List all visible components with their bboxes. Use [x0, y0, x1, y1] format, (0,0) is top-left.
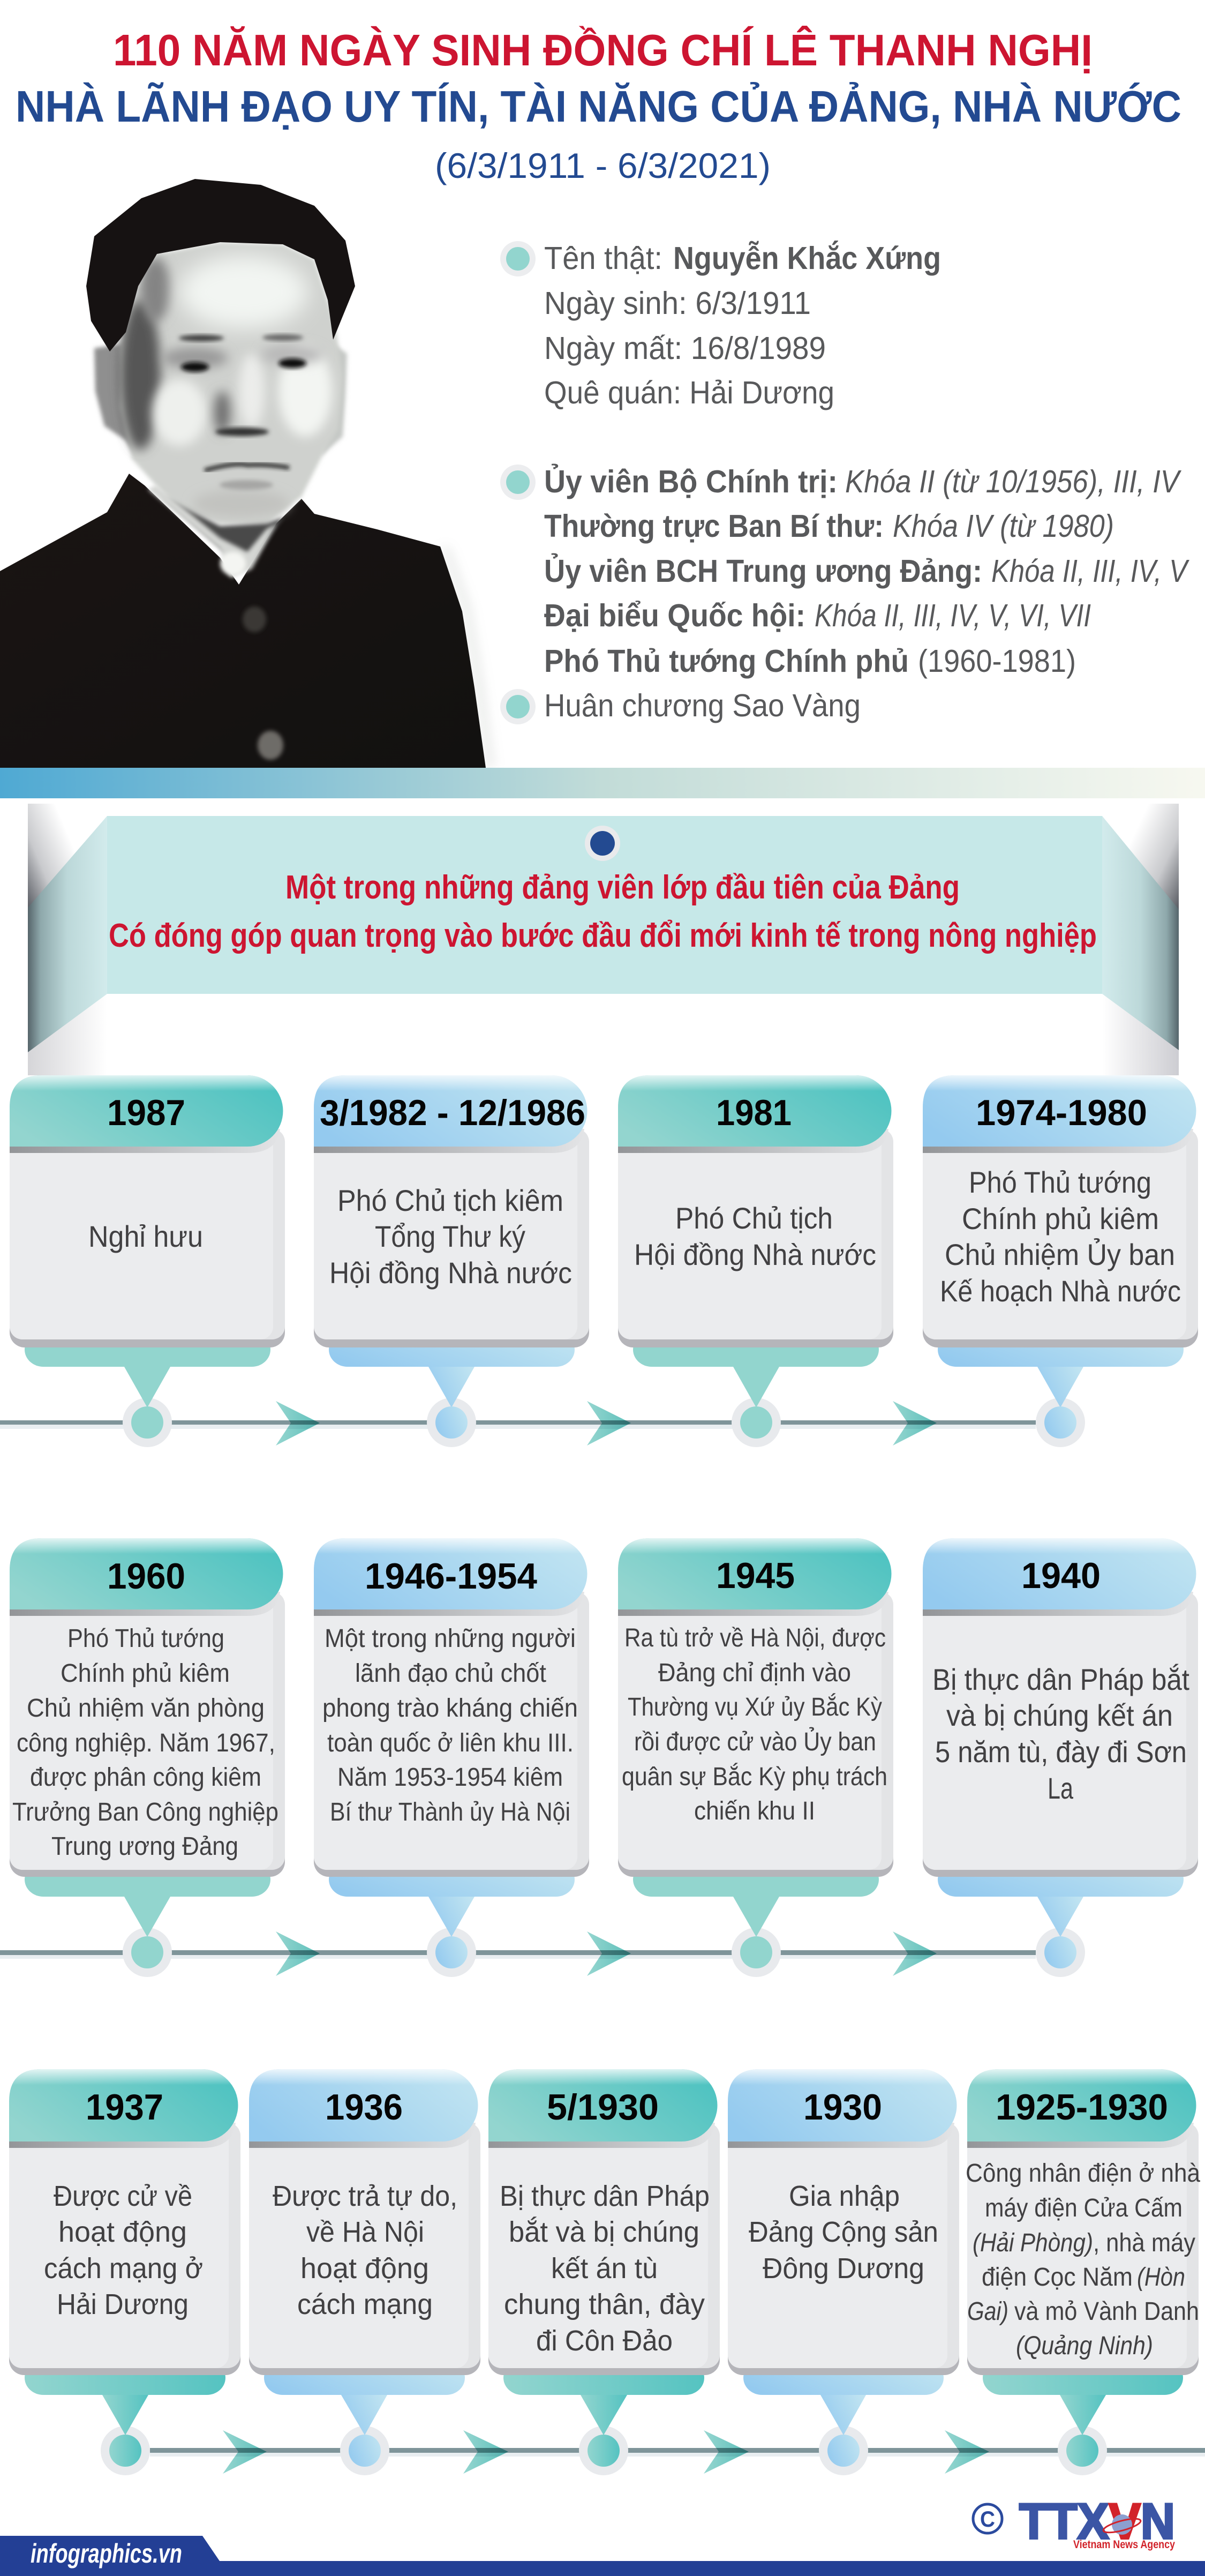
card text: 1930: 1930: [803, 2087, 882, 2128]
card text: 1937: 1937: [86, 2087, 163, 2128]
card text: 1960: 1960: [107, 1556, 185, 1597]
card text: 5/1930: chung thân, đày: [504, 2288, 705, 2320]
card text: 1946-1954: Năm 1953-1954 kiêm: [337, 1763, 563, 1792]
card text: 1960: Trưởng Ban Công nghiệp: [12, 1798, 278, 1826]
arrows row 2: [276, 1931, 937, 1976]
personal info list: Nguyễn Khắc Xứng: [673, 241, 941, 276]
card text: 1940: La: [1048, 1771, 1074, 1805]
timeline row 1 line: [0, 1420, 1036, 1429]
card text: 1981: [634, 1092, 876, 1271]
personal info list: Ủy viên BCH Trung ương Đảng:: [544, 553, 982, 589]
personal info list: Khóa IV (từ 1980): [893, 508, 1114, 544]
card text: 5/1930: 5/1930: [547, 2087, 659, 2128]
card: 3/1982 - 12/1986: [314, 1075, 589, 1447]
timeline row 3 line: [150, 2448, 1205, 2457]
card text: 1987: 1987: [107, 1092, 185, 1133]
card text: 1936: về Hà Nội: [306, 2216, 424, 2248]
card text: 1960: Phó Thủ tướng: [67, 1624, 224, 1653]
card text: 3/1982 - 12/1986: Tổng Thư ký: [375, 1219, 525, 1253]
icon: bullet: [500, 241, 536, 276]
card text: 1946-1954: Một trong những người: [325, 1624, 576, 1653]
card text: 1925-1930: , nhà máy: [1093, 2229, 1195, 2257]
card: 1945: [618, 1538, 893, 1977]
personal info list: Quê quán: Hải Dương: [544, 375, 834, 410]
card text: 1936: 1936: [325, 2087, 403, 2128]
card text: 1981: Hội đồng Nhà nước: [634, 1238, 876, 1271]
card text: 3/1982 - 12/1986: Hội đồng Nhà nước: [329, 1256, 572, 1290]
card text: 1946-1954: phong trào kháng chiến: [322, 1694, 578, 1723]
card text: 1930: Gia nhập: [789, 2180, 900, 2212]
card: 1940: [923, 1538, 1198, 1977]
card text: 1925-1930: điện Cọc Năm: [982, 2263, 1133, 2292]
card text: 1946-1954: [322, 1556, 578, 1826]
card text: 1936: hoạt động: [300, 2252, 429, 2285]
personal info list: Khóa II, III, IV, V, VI, VII: [815, 598, 1091, 633]
card text: 1925-1930: (Hải Phòng): [973, 2229, 1093, 2257]
card: 1936: [249, 2069, 480, 2475]
card text: 1937: cách mạng ở: [44, 2252, 203, 2285]
icon: bullet: [500, 465, 536, 500]
card text: 5/1930: bắt và bị chúng: [509, 2216, 699, 2248]
arrows row 3: [223, 2430, 989, 2474]
card text: 1940: 1940: [1021, 1555, 1101, 1596]
card text: 1925-1930: máy điện Cửa Cấm: [985, 2194, 1183, 2222]
card: 1987: [10, 1075, 285, 1447]
title: 110 NĂM NGÀY SINH ĐỒNG CHÍ LÊ THANH NGHỊ: [113, 25, 1093, 75]
personal info list: Tên thật:: [544, 241, 662, 276]
card text: 1987: [88, 1092, 203, 1253]
card text: 1974-1980: Kế hoạch Nhà nước: [940, 1274, 1181, 1308]
personal info list: Huân chương Sao Vàng: [544, 688, 861, 723]
card text: 3/1982 - 12/1986: 3/1982 - 12/1986: [320, 1092, 585, 1133]
portrait photo: [0, 179, 495, 768]
card text: 1930: [749, 2087, 938, 2285]
title: [16, 25, 1181, 185]
personal info list: Phó Thủ tướng Chính phủ: [544, 643, 909, 679]
title: (6/3/1911 - 6/3/2021): [435, 146, 771, 185]
card text: 1946-1954: lãnh đạo chủ chốt: [355, 1659, 546, 1688]
card: 1981: [618, 1075, 893, 1447]
card text: 1925-1930: 1925-1930: [996, 2087, 1168, 2128]
card text: 1960: Chủ nhiệm văn phòng: [27, 1694, 265, 1723]
card text: 1974-1980: Chính phủ kiêm: [962, 1202, 1159, 1235]
icon: blue dot: [585, 826, 620, 861]
card text: 1960: [12, 1556, 278, 1861]
card text: 1940: và bị chúng kết án: [946, 1698, 1173, 1732]
card: 1925-1930: [967, 2069, 1199, 2475]
icon: bullet: [500, 689, 536, 724]
banner text: Một trong những đảng viên lớp đầu tiên của Đảng: [285, 869, 960, 906]
card text: 1960: công nghiệp. Năm 1967,: [17, 1729, 275, 1757]
personal info list: Đại biểu Quốc hội:: [544, 598, 805, 633]
footer site name: infographics.vn: [31, 2538, 182, 2568]
card text: 1940: 5 năm tù, đày đi Sơn: [935, 1735, 1187, 1769]
card text: 3/1982 - 12/1986: Phó Chủ tịch kiêm: [337, 1184, 563, 1217]
card text: 1925-1930: (Hòn: [1137, 2263, 1185, 2292]
card: 1930: [728, 2069, 959, 2475]
card text: 1930: Đông Dương: [763, 2252, 924, 2285]
card: 1960: [10, 1538, 285, 1977]
logo: TTXVN: Vietnam News Agency: [1073, 2538, 1175, 2551]
card text: 1960: Chính phủ kiêm: [61, 1659, 230, 1688]
timeline row 2 line: [0, 1950, 1036, 1959]
card text: 1937: Hải Dương: [57, 2288, 189, 2320]
card text: 1937: Được cử về: [54, 2180, 192, 2212]
card text: 1974-1980: Chủ nhiệm Ủy ban: [945, 1238, 1175, 1271]
card text: 1946-1954: toàn quốc ở liên khu III.: [327, 1729, 574, 1757]
card text: 1930: Đảng Cộng sản: [749, 2216, 938, 2248]
card text: 1960: được phân công kiêm: [30, 1763, 261, 1792]
card: 5/1930: [488, 2069, 720, 2475]
card text: 1974-1980: 1974-1980: [976, 1092, 1147, 1133]
banner text: [109, 869, 1097, 954]
card text: 1946-1954: Bí thư Thành ủy Hà Nội: [330, 1798, 570, 1826]
arrows row 1: [276, 1401, 937, 1446]
card text: 1937: [44, 2087, 203, 2320]
card text: 1937: hoạt động: [58, 2216, 187, 2248]
footer bar: [0, 2536, 1205, 2576]
card text: 1945: Ra tù trở về Hà Nội, được: [624, 1624, 886, 1652]
card text: 1960: Trung ương Đảng: [51, 1832, 238, 1861]
card text: 1925-1930: (Quảng Ninh): [1016, 2332, 1153, 2360]
card text: 1945: [622, 1555, 887, 1825]
card text: 1945: 1945: [716, 1555, 795, 1596]
personal info list: Ngày mất: 16/8/1989: [544, 331, 826, 366]
gradient divider band: [0, 768, 1205, 798]
card text: 1945: Thường vụ Xứ ủy Bắc Kỳ: [628, 1693, 882, 1721]
card text: 1974-1980: Phó Thủ tướng: [969, 1165, 1151, 1199]
card text: 1945: rồi được cử vào Ủy ban: [634, 1727, 876, 1756]
card text: 3/1982 - 12/1986: [320, 1092, 585, 1290]
card: 1937: [9, 2069, 240, 2475]
card: 1946-1954: [314, 1538, 589, 1977]
card text: 5/1930: đi Côn Đảo: [536, 2325, 673, 2357]
card text: 1946-1954: 1946-1954: [365, 1556, 537, 1597]
card text: 1925-1930: Gai): [967, 2297, 1008, 2326]
card text: 1987: Nghỉ hưu: [88, 1219, 203, 1253]
card text: 1925-1930: [966, 2087, 1200, 2360]
card text: 1936: Được trả tự do,: [273, 2180, 457, 2212]
card text: 1936: cách mạng: [297, 2288, 433, 2320]
banner: summary ribbon: [28, 804, 1179, 1075]
card: 1974-1980: [923, 1075, 1198, 1447]
icon: copyright: [973, 2504, 1002, 2533]
icon: copyright: C: [980, 2506, 995, 2532]
card text: 1940: [932, 1555, 1189, 1805]
personal info list: Ngày sinh: 6/3/1911: [544, 286, 811, 321]
card text: 1981: Phó Chủ tịch: [675, 1201, 833, 1235]
personal info list: Ủy viên Bộ Chính trị:: [544, 463, 838, 499]
card text: 1981: 1981: [716, 1092, 792, 1133]
logo: TTXVN: TTXVN: [1019, 2493, 1175, 2549]
card text: 1945: Đảng chỉ định vào: [658, 1659, 851, 1687]
personal info list: Thường trực Ban Bí thư:: [544, 508, 884, 544]
card text: 5/1930: [500, 2087, 710, 2357]
card text: 1974-1980: [940, 1092, 1181, 1308]
card text: 5/1930: Bị thực dân Pháp: [500, 2180, 710, 2212]
card text: 1945: chiến khu II: [694, 1797, 815, 1825]
card text: 1945: quân sự Bắc Kỳ phụ trách: [622, 1762, 887, 1791]
personal info list: [500, 241, 1189, 724]
personal info list: (1960-1981): [918, 643, 1076, 679]
card text: 1936: [273, 2087, 457, 2320]
card text: 5/1930: kết án tù: [551, 2252, 658, 2285]
